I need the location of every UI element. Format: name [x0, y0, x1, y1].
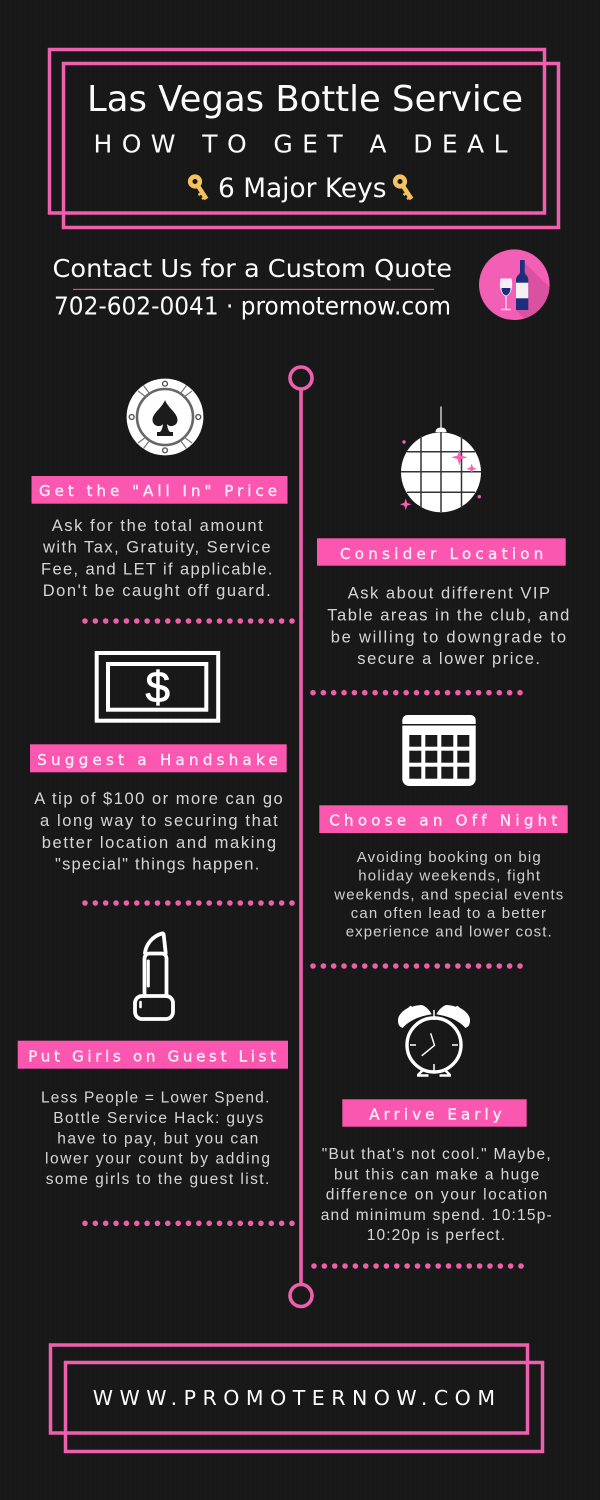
label text: Put Girls on Guest List — [28, 1047, 276, 1065]
body text: can often lead to a better — [351, 905, 546, 922]
body text: difference on your location — [326, 1186, 547, 1203]
body text: Don't be caught off guard. — [43, 582, 271, 600]
dotted divider — [313, 963, 523, 969]
body text: 10:20p is perfect. — [367, 1227, 505, 1244]
body text — [327, 585, 569, 668]
label text: Consider Location — [340, 545, 543, 563]
icon: wine bottle and glass — [479, 249, 550, 320]
body text: Ask about different VIP — [348, 585, 550, 603]
body text: be willing to downgrade to — [331, 629, 566, 647]
footer panel — [50, 1345, 542, 1452]
icon: lipstick — [135, 933, 173, 1019]
panel: suggest a handshake — [30, 653, 295, 903]
dotted divider — [314, 1263, 524, 1269]
label — [30, 744, 287, 772]
body text: "But that's not cool." Maybe, — [322, 1146, 551, 1163]
label — [317, 538, 566, 566]
icon: disco ball — [400, 406, 481, 512]
panel: consider location — [313, 406, 569, 693]
body text: experience and lower cost. — [346, 924, 552, 941]
icon: dollar bill — [97, 653, 218, 721]
dotted divider — [85, 900, 295, 906]
dotted divider — [85, 1221, 295, 1226]
icon: dollar bill: $ — [145, 663, 170, 712]
key count heading: 6 Major Keys — [218, 173, 386, 204]
contact details: 702-602-0041 · promoternow.com — [54, 292, 451, 320]
dotted divider — [313, 690, 523, 696]
title: Las Vegas Bottle Service — [87, 79, 523, 120]
body text: some girls to the guest list. — [46, 1171, 269, 1188]
body text — [333, 849, 563, 941]
icon: right key — [395, 177, 412, 199]
body text — [41, 1090, 270, 1188]
body text: have to pay, but you can — [57, 1130, 258, 1147]
body text: with Tax, Gratuity, Service — [42, 538, 270, 556]
label — [18, 1041, 288, 1069]
body text: Bottle Service Hack: guys — [53, 1110, 264, 1127]
label text: Arrive Early — [369, 1105, 502, 1123]
contact divider — [73, 289, 434, 290]
body text: Less People = Lower Spend. — [41, 1090, 269, 1107]
label text: Choose an Off Night — [329, 811, 557, 829]
body text: a long way to securing that — [40, 812, 278, 830]
footer url: WWW.PROMOTERNOW.COM — [93, 1386, 495, 1410]
icon: left key — [190, 177, 206, 199]
label text: Get the "All In" Price — [39, 482, 277, 500]
label — [342, 1099, 527, 1127]
footer frames — [50, 1345, 542, 1452]
body text: Ask for the total amount — [52, 517, 263, 535]
body text: Avoiding booking on big — [357, 849, 541, 866]
label — [32, 476, 288, 504]
body text: Table areas in the club, and — [327, 607, 569, 625]
body text: better location and making — [42, 834, 276, 852]
body text: and minimum spend. 10:15p- — [321, 1207, 552, 1224]
panel: arrive early — [314, 1005, 552, 1266]
title frames — [50, 50, 558, 228]
panel: put girls on guest list — [18, 933, 295, 1223]
label — [319, 805, 568, 833]
body text — [34, 790, 283, 873]
body text — [321, 1146, 552, 1244]
body text: Fee, and LET if applicable. — [41, 560, 272, 578]
body text: lower your count by adding — [45, 1151, 270, 1168]
body text: but this can make a huge — [334, 1166, 539, 1183]
body text: secure a lower price. — [357, 650, 540, 668]
body text — [41, 517, 272, 600]
body text: holiday weekends, fight — [358, 868, 541, 885]
header panel — [50, 50, 558, 228]
panel: get the all in price — [32, 379, 295, 621]
panel: choose an off night — [313, 715, 568, 966]
icon: alarm clock — [398, 1005, 470, 1076]
dotted divider — [85, 618, 295, 624]
icon: poker chip — [127, 379, 203, 455]
subtitle: HOW TO GET A DEAL — [94, 130, 508, 158]
label text: Suggest a Handshake — [37, 751, 278, 769]
body text: "special" things happen. — [55, 855, 259, 873]
body text: weekends, and special events — [333, 886, 563, 903]
body text: A tip of $100 or more can go — [34, 790, 283, 808]
contact block — [54, 249, 550, 320]
timeline spine — [290, 367, 312, 1306]
icon: calendar — [402, 715, 476, 786]
contact heading: Contact Us for a Custom Quote — [52, 254, 452, 283]
